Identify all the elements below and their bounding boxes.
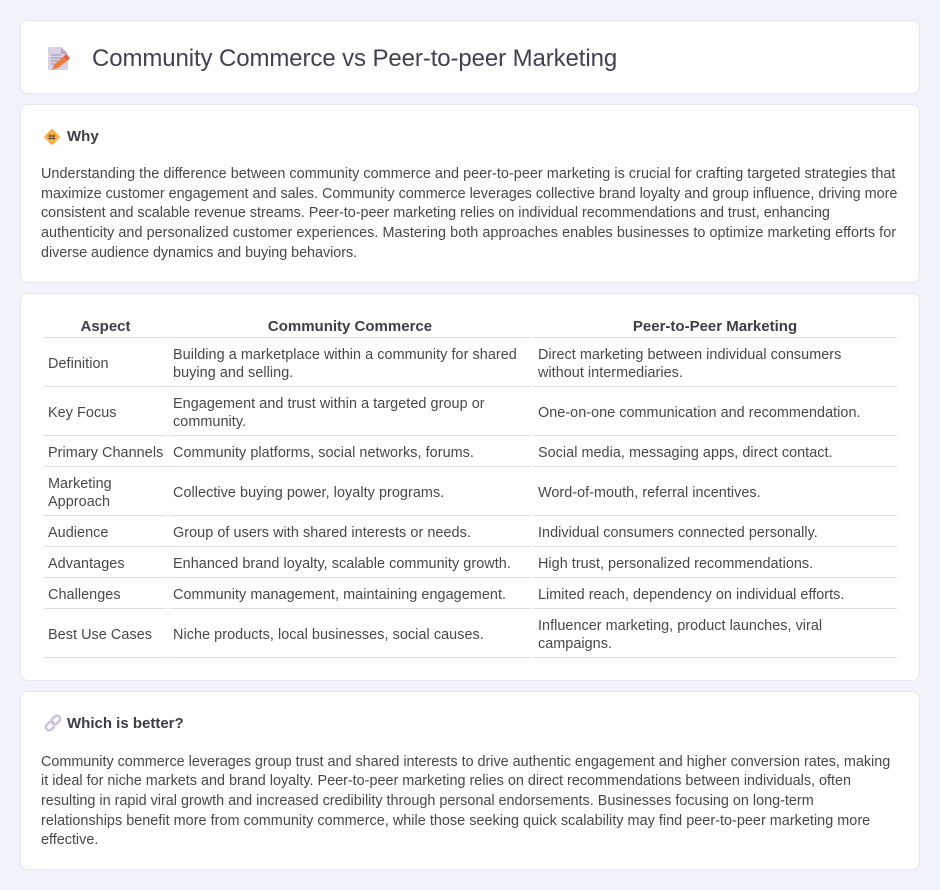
text block: verdict: it ideal for niche markets and brand loyalty. Peer-to-peer marketing relies on direct recommendations between individuals, often [41,773,851,789]
comparison table: Challenges [48,587,121,603]
comparison table: Marketing [48,476,112,492]
comparison table: Primary Channels [48,445,163,461]
comparison table: Group of users with shared interests or needs. [173,525,471,541]
icon: chain link [44,714,62,732]
text block: why explanation: authenticity and personalized customer experiences. Mastering both approaches enables businesses to optimize marketing efforts for [41,225,896,241]
comparison table: Aspect [80,318,131,334]
comparison table: community. [173,414,246,430]
comparison table: Advantages [48,556,125,572]
text block: why explanation: Understanding the difference between community commerce and peer-to-peer marketing is crucial for crafting targeted strategies that [41,166,895,182]
comparison table: Best Use Cases [48,627,152,643]
text block: verdict: Community commerce leverages group trust and shared interests to drive authentic engagement and higher conversion rates, making [41,754,890,770]
icon: orange diamond [44,129,60,145]
comparison table [44,318,897,658]
panel: comparison table [20,293,920,681]
heading: why: Why [67,128,99,145]
comparison table: Social media, messaging apps, direct contact. [538,445,833,461]
comparison table: Individual consumers connected personally. [538,525,818,541]
comparison table: High trust, personalized recommendations. [538,556,813,572]
comparison table: campaigns. [538,636,612,652]
panel: which is better [20,691,920,870]
icon: document with pencil [48,47,70,70]
comparison table: Peer-to-Peer Marketing [633,318,797,334]
comparison table: Enhanced brand loyalty, scalable community growth. [173,556,511,572]
text block: why explanation: diverse audience dynamics and buying behaviors. [41,245,357,261]
comparison table: Community platforms, social networks, forums. [173,445,474,461]
comparison table: Community management, maintaining engagement. [173,587,506,603]
panel: why [20,104,920,283]
comparison table: Building a marketplace within a community for shared [173,347,517,363]
comparison table: Direct marketing between individual consumers [538,347,841,363]
text block: verdict: relationships benefit more from community commerce, while those seeking quick scalability may find peer-to-peer marketing more [41,813,870,829]
panel: title header [20,20,920,94]
comparison table: Niche products, local businesses, social causes. [173,627,484,643]
comparison table: Definition [48,356,109,372]
comparison table: Limited reach, dependency on individual efforts. [538,587,844,603]
comparison table: Collective buying power, loyalty programs. [173,485,444,501]
text block: verdict: effective. [41,832,98,848]
text block: why explanation: maximize customer engagement and sales. Community commerce leverages collective brand loyalty and group influence, driving more [41,186,897,202]
comparison table: Approach [48,494,110,510]
text block: why explanation: consistent and scalable revenue streams. Peer-to-peer marketing relies on individual recommendations and trust, enhancing [41,205,830,221]
heading: which is better: Which is better? [67,715,184,732]
comparison table: buying and selling. [173,365,293,381]
comparison table: Influencer marketing, product launches, viral [538,618,822,634]
text block: verdict: resulting in rapid viral growth and increased credibility through personal endorsements. Businesses focusing on long-term [41,793,814,809]
comparison table: Engagement and trust within a targeted group or [173,396,485,412]
text block: why explanation [41,166,897,261]
comparison table: without intermediaries. [538,365,683,381]
comparison table: Audience [48,525,108,541]
comparison table: Key Focus [48,405,117,421]
comparison table: Word-of-mouth, referral incentives. [538,485,761,501]
comparison table: One-on-one communication and recommendation. [538,405,861,421]
title: Community Commerce vs Peer-to-peer Marketing [92,45,617,72]
text block: verdict [41,754,890,848]
comparison table: Community Commerce [268,318,432,334]
